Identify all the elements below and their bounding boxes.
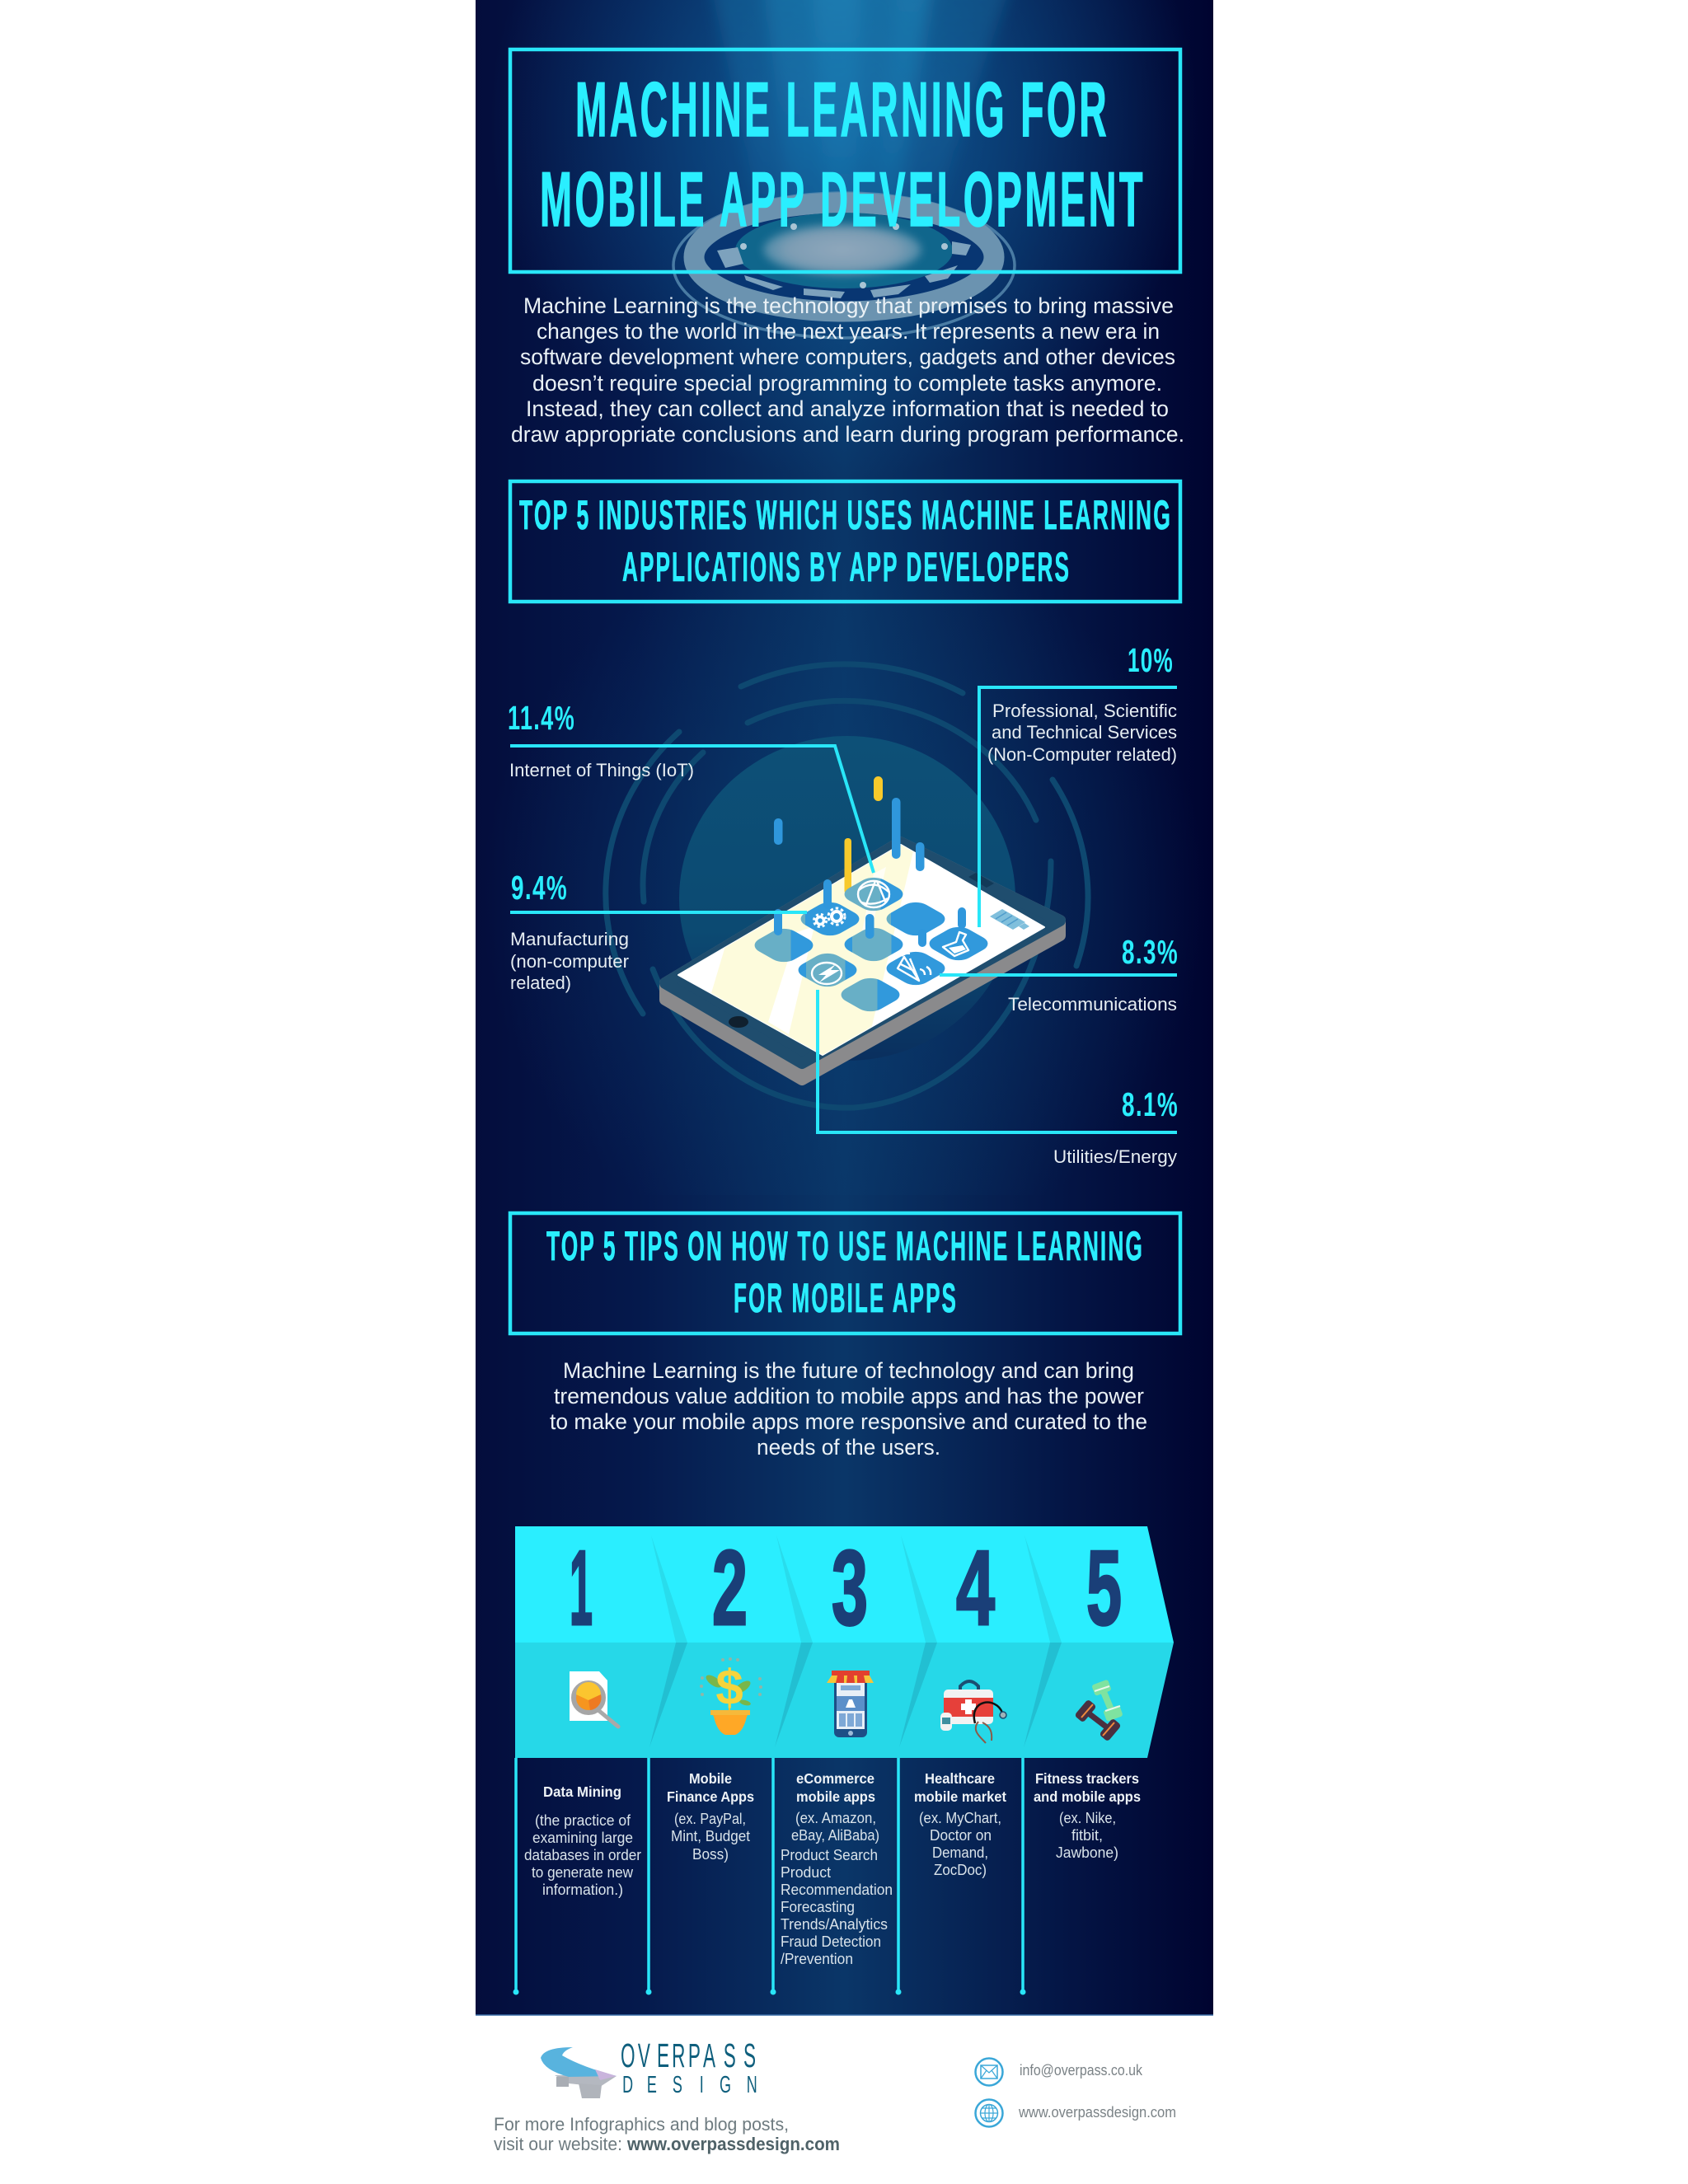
step numbers (570, 1529, 1122, 1647)
callout: Manufacturing: related) (510, 972, 571, 993)
column 4 text: healthcare: (ex. MyChart, (919, 1809, 1001, 1826)
contact: email: info@overpass.co.uk (1020, 2062, 1143, 2079)
callout: Manufacturing: Manufacturing (510, 929, 629, 949)
icon: finance money plant (700, 1657, 762, 1735)
callout: Utilities/Energy: Utilities/Energy (1053, 1146, 1177, 1167)
callout: Professional services: (Non-Computer related) (987, 744, 1177, 765)
contact: website: www.overpassdesign.com (1018, 2104, 1176, 2121)
column 3 text: ecommerce: Fraud Detection (781, 1933, 881, 1950)
app tile: antenna (880, 949, 951, 988)
callout: Internet of Things: Internet of Things (IoT) (509, 760, 694, 780)
column 1 text: data mining: examining large (532, 1829, 633, 1846)
column 5 text: fitness: Fitness trackers (1035, 1770, 1139, 1787)
callout: Manufacturing: (non-computer (510, 951, 629, 972)
callout: Telecommunications (940, 933, 1179, 1015)
column 3 text: ecommerce (781, 1770, 893, 1967)
contact: website (976, 2100, 1176, 2126)
column 5 text: fitness (1034, 1770, 1141, 1861)
app tile: empty tiles and bars layer (748, 776, 951, 1015)
column 3 text: ecommerce: Recommendation (781, 1881, 893, 1898)
intro paragraph: software development where computers, gadgets and other devices (520, 344, 1175, 369)
callout: Telecommunications: 8.3% (1122, 933, 1179, 971)
title box (510, 49, 1180, 272)
smartphone illustration (665, 842, 1060, 1080)
footer call to action: For more Infographics and blog posts, (494, 2114, 789, 2135)
column 3 text: ecommerce: Product Search (781, 1846, 878, 1863)
callout: Utilities/Energy (818, 990, 1179, 1167)
illustration backdrop: circle and rings (606, 664, 1088, 1108)
footer call to action: visit our website: (494, 2134, 622, 2154)
column 1 text: data mining: databases in order (524, 1846, 641, 1863)
tips intro paragraph (550, 1358, 1147, 1460)
icon: medical kit (940, 1681, 1006, 1743)
section heading: top 5 tips: TOP 5 TIPS ON HOW TO USE MACHINE LEARNING (546, 1223, 1144, 1269)
column 3 text: ecommerce: Product (781, 1863, 831, 1881)
footer call to action (494, 2114, 840, 2154)
column 2 text: mobile finance: Mint, Budget (671, 1827, 750, 1844)
title text: MACHINE LEARNING FOR (575, 66, 1109, 152)
column 3 text: ecommerce: eCommerce (796, 1770, 874, 1787)
callout: Telecommunications: Telecommunications (1008, 994, 1177, 1015)
column 4 text: healthcare: ZocDoc) (934, 1861, 987, 1878)
callout: Manufacturing: 9.4% (511, 869, 568, 907)
light beam from hologram (709, 0, 1014, 247)
column 3 text: ecommerce: eBay, AliBaba) (791, 1826, 879, 1844)
column 4 text: healthcare: mobile market (914, 1788, 1006, 1805)
app tile: energy bolt (792, 950, 863, 990)
column 4 text: healthcare: Doctor on (930, 1826, 992, 1844)
step numbers: 4 (956, 1529, 995, 1647)
icon: data mining magnifier (570, 1671, 618, 1727)
column 5 text: fitness: fitbit, (1071, 1826, 1103, 1844)
chevron shadows (649, 1535, 1062, 1747)
column 2 text: mobile finance: Boss) (692, 1845, 729, 1863)
column 3 text: ecommerce: Forecasting (781, 1898, 855, 1915)
column 5 text: fitness: (ex. Nike, (1059, 1809, 1116, 1826)
column 2 text: mobile finance: Finance Apps (667, 1788, 754, 1805)
column 5 text: fitness: and mobile apps (1034, 1788, 1141, 1805)
callout: Utilities/Energy: 8.1% (1122, 1085, 1179, 1123)
app tile: globe (838, 874, 909, 914)
icon: dumbbells (1074, 1680, 1123, 1741)
section heading: top 5 tips (510, 1213, 1180, 1333)
intro paragraph: doesn’t require special programming to complete tasks anymore. (532, 371, 1162, 396)
column 2 text: mobile finance: (ex. PayPal, (674, 1810, 746, 1827)
intro paragraph: Machine Learning is the technology that promises to bring massive (523, 293, 1174, 318)
column 3 text: ecommerce: mobile apps (796, 1788, 875, 1805)
column 2 text: mobile finance: Mobile (689, 1770, 732, 1787)
callout: Professional services: and Technical Services (992, 722, 1177, 743)
callout: Professional services: Professional, Scientific (992, 701, 1177, 721)
column 1 text: data mining: to generate new (532, 1863, 634, 1881)
app tile: flask (923, 907, 994, 963)
intro paragraph: draw appropriate conclusions and learn during program performance. (511, 422, 1184, 447)
intro paragraph: Instead, they can collect and analyze information that is needed to (526, 396, 1169, 421)
column 2 text: mobile finance (667, 1770, 754, 1863)
step numbers: 5 (1086, 1529, 1122, 1647)
step numbers: 1 (570, 1529, 593, 1647)
column dividers with end dots (513, 1758, 1025, 1994)
tips intro paragraph: to make your mobile apps more responsive and curated to the (550, 1409, 1147, 1434)
tips intro paragraph: needs of the users. (757, 1435, 940, 1460)
callout: Manufacturing (510, 869, 807, 993)
hologram disc (673, 193, 1015, 338)
footer logo (541, 2037, 757, 2098)
logo wordmark (621, 2037, 757, 2098)
intro paragraph (511, 293, 1184, 447)
callout: Internet of Things: 11.4% (508, 699, 575, 737)
dark infographic panel background (476, 0, 1213, 2015)
intro paragraph: changes to the world in the next years. It represents a new era in (537, 319, 1160, 344)
column 1 text: data mining: information.) (542, 1881, 623, 1898)
column 3 text: ecommerce: (ex. Amazon, (795, 1809, 876, 1826)
icon: finance money plant: $ (715, 1660, 743, 1715)
column 3 text: ecommerce: /Prevention (781, 1950, 853, 1967)
section heading: top 5 tips: FOR MOBILE APPS (734, 1275, 958, 1321)
contact: email (976, 2059, 1143, 2085)
section heading: top 5 industries: APPLICATIONS BY APP DEVELOPERS (622, 544, 1071, 590)
callout: Professional services: 10% (1128, 641, 1174, 679)
logo wordmark: OVERPASS (621, 2037, 756, 2075)
title text (540, 66, 1146, 242)
section heading: top 5 industries (510, 481, 1180, 602)
column 1 text: data mining: (the practice of (535, 1811, 631, 1829)
floating bars over tiles (774, 909, 926, 947)
callout: Professional services (979, 641, 1177, 927)
numbered arrow ribbon (515, 1526, 1174, 1758)
step numbers: 2 (712, 1529, 748, 1647)
callout: Internet of Things (508, 699, 874, 873)
app tile: gears (795, 879, 865, 939)
column 4 text: healthcare: Demand, (932, 1844, 988, 1861)
column 3 text: ecommerce: Trends/Analytics (781, 1915, 888, 1933)
column 4 text: healthcare: Healthcare (925, 1770, 995, 1787)
column 1 text: data mining: Data Mining (543, 1783, 621, 1800)
footer call to action: www.overpassdesign.com (626, 2134, 840, 2154)
step numbers: 3 (832, 1529, 868, 1647)
tips intro paragraph: tremendous value addition to mobile apps and has the power (554, 1384, 1144, 1408)
battery indicator (990, 909, 1029, 930)
tips intro paragraph: Machine Learning is the future of technology and can bring (563, 1358, 1134, 1383)
column 5 text: fitness: Jawbone) (1056, 1844, 1118, 1861)
logo wordmark: DESIGN (622, 2072, 757, 2098)
column 1 text: data mining (524, 1783, 641, 1898)
icon: ecommerce phone shop (827, 1671, 874, 1737)
column 4 text: healthcare (914, 1770, 1006, 1878)
